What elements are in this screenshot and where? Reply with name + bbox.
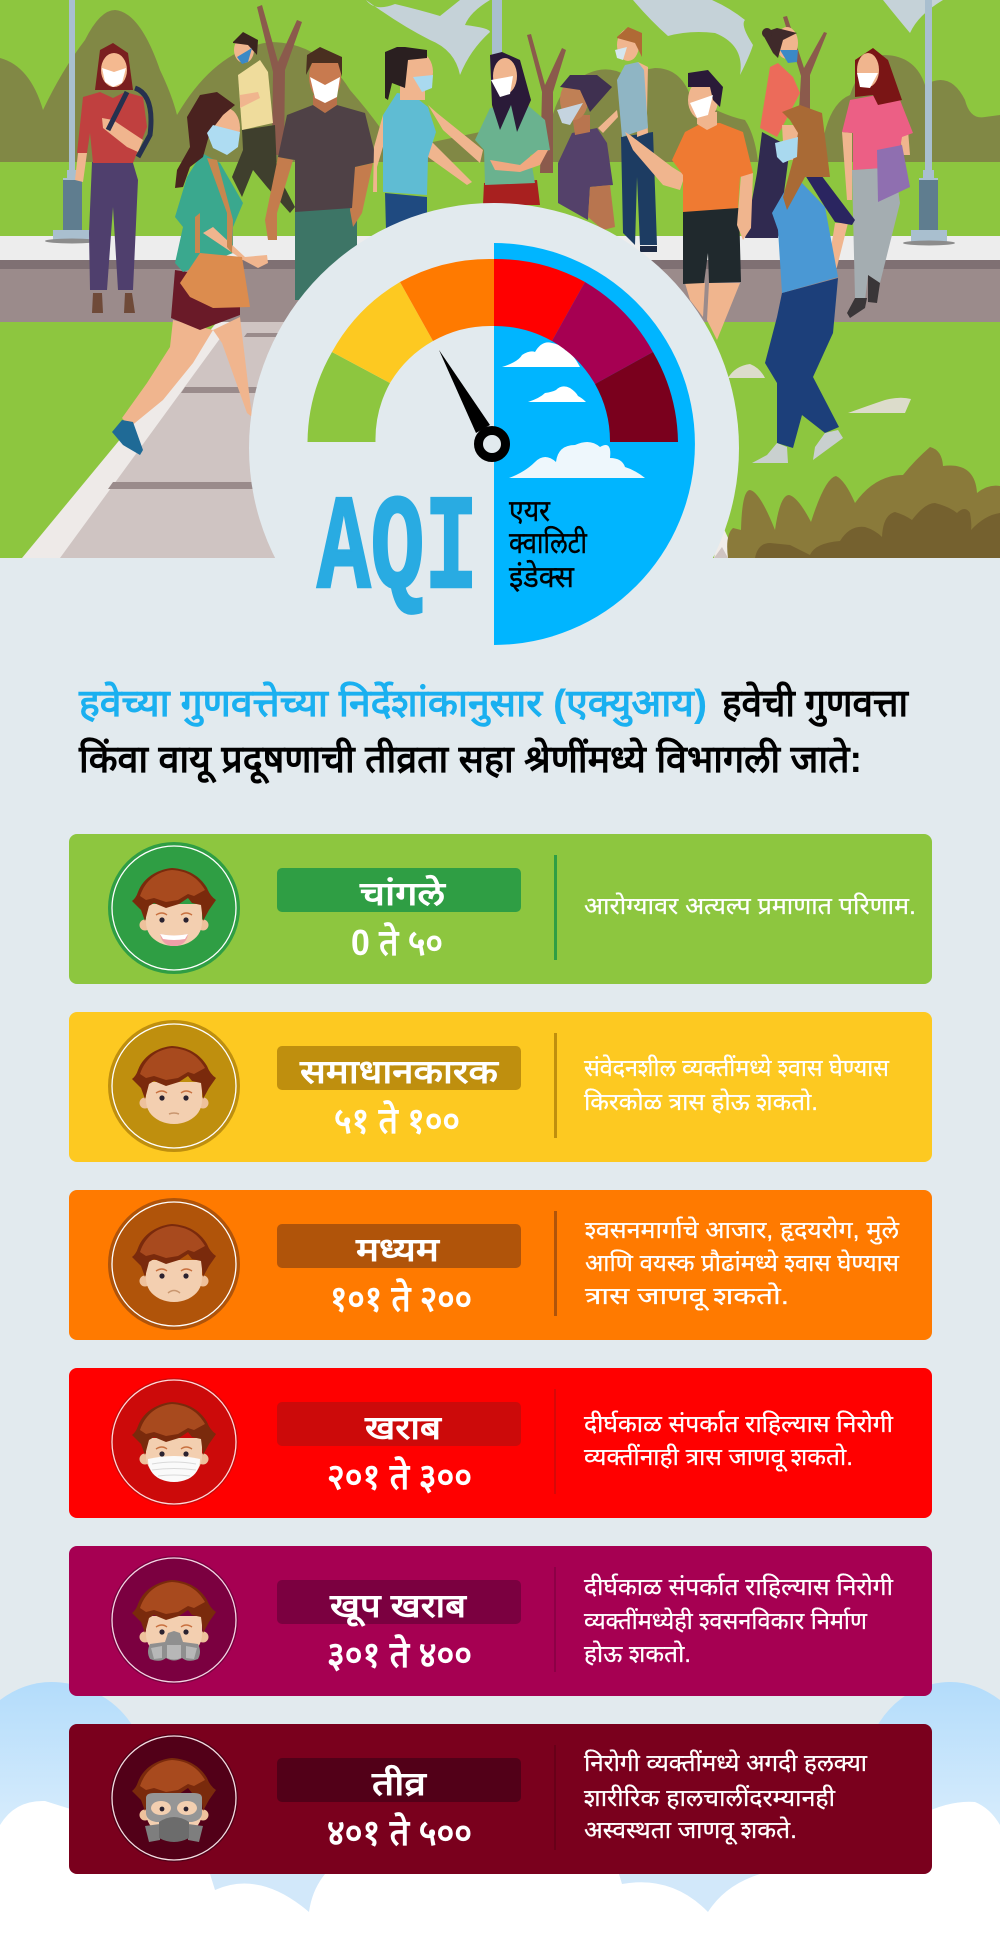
panel: severe: तीव्र: [371, 1764, 428, 1802]
description: [584, 1573, 894, 1668]
range: २०१ ते ३००: [327, 1456, 472, 1497]
label pill: [277, 868, 521, 912]
person: man in blue vest: [598, 27, 657, 252]
AQI wordmark: AQI: [317, 475, 478, 628]
description: [584, 1054, 890, 1116]
heading: [78, 681, 909, 784]
lamp posts: [53, 0, 947, 242]
gauge caption: क्वालिटी: [509, 526, 588, 560]
heading: हवेची गुणवत्ता: [721, 681, 909, 727]
label pill: [277, 1580, 521, 1624]
gauge caption: इंडेक्स: [509, 560, 575, 594]
range: 0 ते ५०: [351, 922, 443, 963]
panel: satisfactory: समाधानकारक: [299, 1053, 500, 1090]
panel: poor: खराब: [364, 1409, 442, 1446]
person: man in orange tee and shorts: [625, 70, 753, 340]
hero scene: park with masked people: [0, 0, 1000, 558]
person: woman in green top: [475, 52, 550, 205]
icon: smiling face: [108, 842, 240, 974]
person: woman with ponytail in blue shirt: [373, 47, 483, 230]
bush foreground: [727, 447, 1000, 558]
panel: moderate: [69, 1190, 932, 1340]
label pill: [277, 1224, 521, 1268]
label pill: [277, 1758, 521, 1802]
icon: face with surgical mask: [110, 1378, 238, 1506]
gauge disc background: [249, 203, 739, 693]
panel: good: चांगले: [359, 874, 447, 912]
background bushes: [0, 10, 1000, 162]
icon: small cloud top: [502, 342, 580, 367]
icon: sad face: [108, 1198, 240, 1330]
panel: very poor: खूप खराब: [329, 1587, 467, 1627]
smoke clouds: [366, 0, 943, 75]
description: शारीरिक हालचालींदरम्यानही: [584, 1784, 836, 1812]
person: background man in yellow shirt: [232, 32, 295, 213]
person: walking woman in teal with tan bag: [112, 92, 268, 455]
person: front woman in blue with navy jeans: [752, 105, 855, 463]
bare trees: [257, 5, 827, 173]
range: १०१ ते २००: [330, 1278, 472, 1319]
description: व्यक्तींनाही त्रास जाणवू शकतो.: [584, 1443, 853, 1472]
description: संवेदनशील व्यक्तींमध्ये श्वास घेण्यास: [584, 1054, 890, 1082]
description: होऊ शकतो.: [584, 1640, 691, 1668]
grass and sky background: [0, 0, 1000, 558]
description: आणि वयस्क प्रौढांमध्ये श्वास घेण्यास: [585, 1249, 900, 1277]
sidewalk: [0, 236, 1000, 260]
panel: very poor: [69, 1546, 932, 1696]
description: किरकोळ त्रास होऊ शकतो.: [584, 1088, 818, 1116]
description: आरोग्यावर अत्यल्प प्रमाणात परिणाम.: [584, 892, 916, 920]
heading: किंवा वायू प्रदूषणाची तीव्रता सहा श्रेणींमध्ये विभागली जाते:: [78, 737, 862, 784]
range: ५१ ते १००: [334, 1100, 460, 1141]
person: man in dark tee: [265, 47, 377, 300]
footpath: [22, 322, 300, 558]
litter rocks: [728, 364, 911, 413]
bottom clouds decoration: [0, 1682, 1000, 1938]
label pill: [277, 1402, 521, 1446]
description: [584, 1410, 894, 1472]
footpath remnant right of gauge: [714, 520, 737, 558]
description: व्यक्तींमध्येही श्वसनविकार निर्माण: [584, 1607, 868, 1635]
panel: satisfactory: [69, 1012, 932, 1162]
icon: neutral face: [108, 1020, 240, 1152]
label pill: [277, 1046, 521, 1090]
description: [584, 1749, 868, 1845]
person: woman in red top with backpack: [75, 43, 151, 313]
gauge blue half with clouds: [494, 243, 695, 645]
gauge colored arc: [308, 259, 678, 442]
icon: small cloud middle: [528, 386, 586, 402]
gauge caption: [509, 495, 588, 594]
road: [0, 260, 1000, 322]
person: background woman in coral: [745, 27, 800, 238]
description: श्वसनमार्गाचे आजार, हृदयरोग, मुले: [585, 1216, 900, 1245]
gauge caption: एयर: [509, 495, 551, 528]
gauge needle: [439, 350, 506, 458]
description: [585, 1216, 900, 1311]
panel: poor: [69, 1368, 932, 1518]
icon: large cloud: [509, 442, 645, 478]
icon: face with full gas mask: [110, 1734, 238, 1862]
description: दीर्घकाळ संपर्कात राहिल्यास निरोगी: [584, 1573, 894, 1601]
description: दीर्घकाळ संपर्कात राहिल्यास निरोगी: [584, 1410, 894, 1438]
range: ३०१ ते ४००: [327, 1634, 472, 1675]
range: ४०१ ते ५००: [327, 1812, 472, 1853]
person: woman in pink top with purple bag: [842, 48, 913, 318]
panel: moderate: मध्यम: [355, 1231, 440, 1268]
person: man in purple hat and tee: [557, 75, 615, 230]
description: अस्वस्थता जाणवू शकते.: [584, 1816, 797, 1845]
panel: good: [69, 834, 932, 984]
description: निरोगी व्यक्तींमध्ये अगदी हलक्या: [584, 1749, 868, 1777]
panel: severe: [69, 1724, 932, 1874]
icon: face with half respirator: [110, 1556, 238, 1684]
description: त्रास जाणवू शकतो.: [585, 1282, 789, 1311]
heading: हवेच्या गुणवत्तेच्या निर्देशांकानुसार (एक्युआय): [78, 681, 707, 727]
